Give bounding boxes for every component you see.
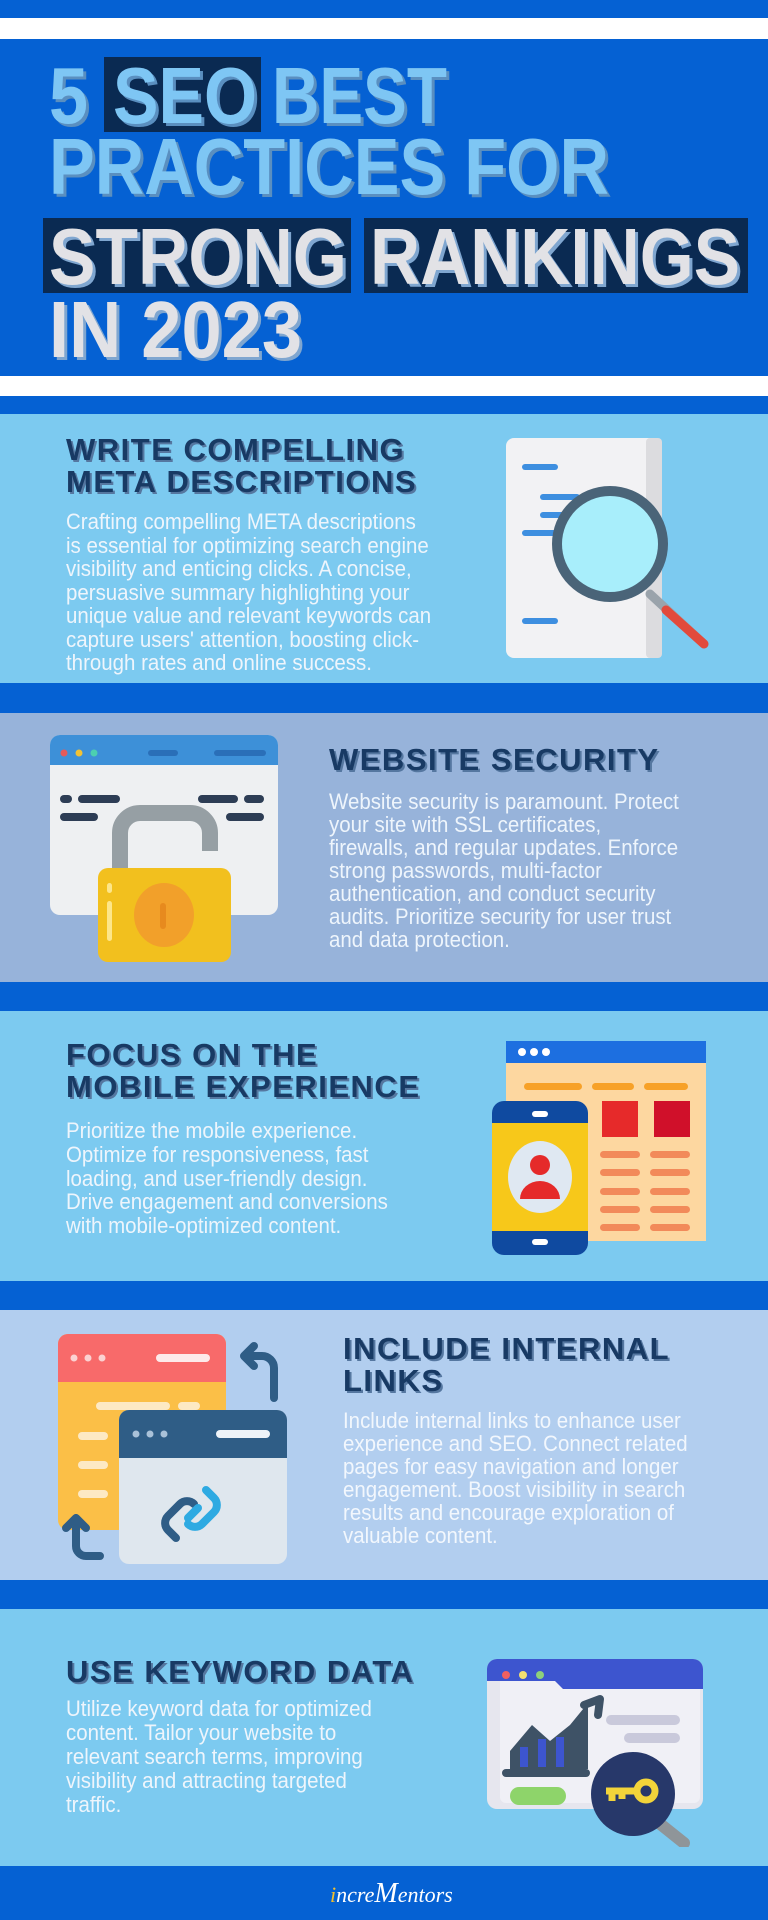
heading: WRITE COMPELLING	[66, 432, 405, 467]
text block: firewalls, and regular updates. Enforce	[329, 835, 678, 860]
title text	[49, 51, 743, 377]
text block: experience and SEO. Connect related	[343, 1431, 688, 1456]
white stripe bottom	[0, 376, 768, 396]
text block: unique value and relevant keywords can	[66, 603, 431, 628]
text block	[329, 789, 679, 952]
footer logo: increMentors	[330, 1878, 453, 1909]
text block: Utilize keyword data for optimized	[66, 1696, 372, 1721]
text block: Website security is paramount. Protect	[329, 789, 679, 814]
text block: strong passwords, multi-factor	[329, 858, 602, 883]
icon: document with magnifier	[506, 438, 708, 658]
text block: Crafting compelling META descriptions	[66, 509, 416, 534]
heading: USE KEYWORD DATA	[66, 1654, 414, 1689]
title text: STRONG	[49, 212, 347, 301]
panel: internal links	[0, 1310, 768, 1580]
title text: IN 2023	[49, 285, 302, 374]
text block: valuable content.	[343, 1523, 498, 1548]
icon: analytics window with key magnifier	[487, 1659, 703, 1847]
icon: linked windows with arrows	[58, 1334, 287, 1564]
text block: visibility and attracting targeted	[66, 1768, 347, 1793]
text block: relevant search terms, improving	[66, 1744, 363, 1769]
text block: audits. Prioritize security for user trust	[329, 904, 671, 929]
text block	[66, 1118, 388, 1238]
text block: and data protection.	[329, 927, 510, 952]
heading	[66, 1037, 420, 1104]
title text: BEST	[275, 54, 450, 143]
highlight box: RANKINGS	[364, 218, 748, 293]
text block: Drive engagement and conversions	[66, 1189, 388, 1214]
text block: capture users' attention, boosting click-	[66, 626, 419, 652]
title panel	[43, 51, 748, 376]
text block: pages for easy navigation and longer	[343, 1454, 679, 1479]
text block: Optimize for responsiveness, fast	[66, 1142, 368, 1167]
heading: LINKS	[343, 1363, 444, 1398]
highlight box: SEO	[104, 57, 261, 132]
text block: visibility and enticing clicks. A concise,	[66, 556, 412, 581]
text block	[343, 1408, 688, 1548]
white stripe top	[0, 18, 768, 39]
text block	[66, 509, 431, 675]
text block: authentication, and conduct security	[329, 881, 655, 906]
title text: PRACTICES FOR	[49, 122, 609, 211]
title text: PRACTICES FOR	[52, 125, 612, 214]
text block: content. Tailor your website to	[66, 1720, 336, 1745]
heading: MOBILE EXPERIENCE	[66, 1069, 420, 1104]
heading	[343, 1331, 670, 1398]
title text: BEST	[272, 51, 447, 140]
panel: mobile experience	[0, 1011, 768, 1281]
text block	[66, 1696, 372, 1817]
title text: 5	[52, 54, 91, 143]
panel: meta descriptions	[0, 414, 768, 683]
highlight box: STRONG	[43, 218, 351, 293]
heading	[66, 432, 417, 499]
text block: through rates and online success.	[66, 650, 372, 675]
icon: phone and web page	[492, 1041, 706, 1255]
text block: is essential for optimizing search engine	[66, 532, 429, 558]
title text: 5	[49, 51, 88, 140]
heading: INCLUDE INTERNAL	[343, 1331, 670, 1366]
title text: STRONG	[52, 215, 350, 304]
title text: IN 2023	[52, 288, 305, 376]
text block: results and encourage exploration of	[343, 1500, 674, 1525]
panel: keyword data	[0, 1609, 768, 1866]
text block: traffic.	[66, 1792, 121, 1817]
title text: SEO	[116, 54, 260, 143]
text block: persuasive summary highlighting your	[66, 580, 409, 604]
panel: website security	[0, 713, 768, 982]
text block: your site with SSL certificates,	[329, 812, 601, 837]
text block: Include internal links to enhance user	[343, 1408, 681, 1433]
heading: WEBSITE SECURITY	[329, 742, 660, 777]
text block: Prioritize the mobile experience.	[66, 1118, 357, 1143]
heading: META DESCRIPTIONS	[66, 464, 417, 499]
text block: loading, and user-friendly design.	[66, 1166, 367, 1191]
icon: browser with padlock	[50, 735, 278, 962]
text block: engagement. Boost visibility in search	[343, 1477, 685, 1502]
title text: SEO	[113, 51, 257, 140]
text block: with mobile-optimized content.	[66, 1213, 341, 1238]
heading: FOCUS ON THE	[66, 1037, 318, 1072]
